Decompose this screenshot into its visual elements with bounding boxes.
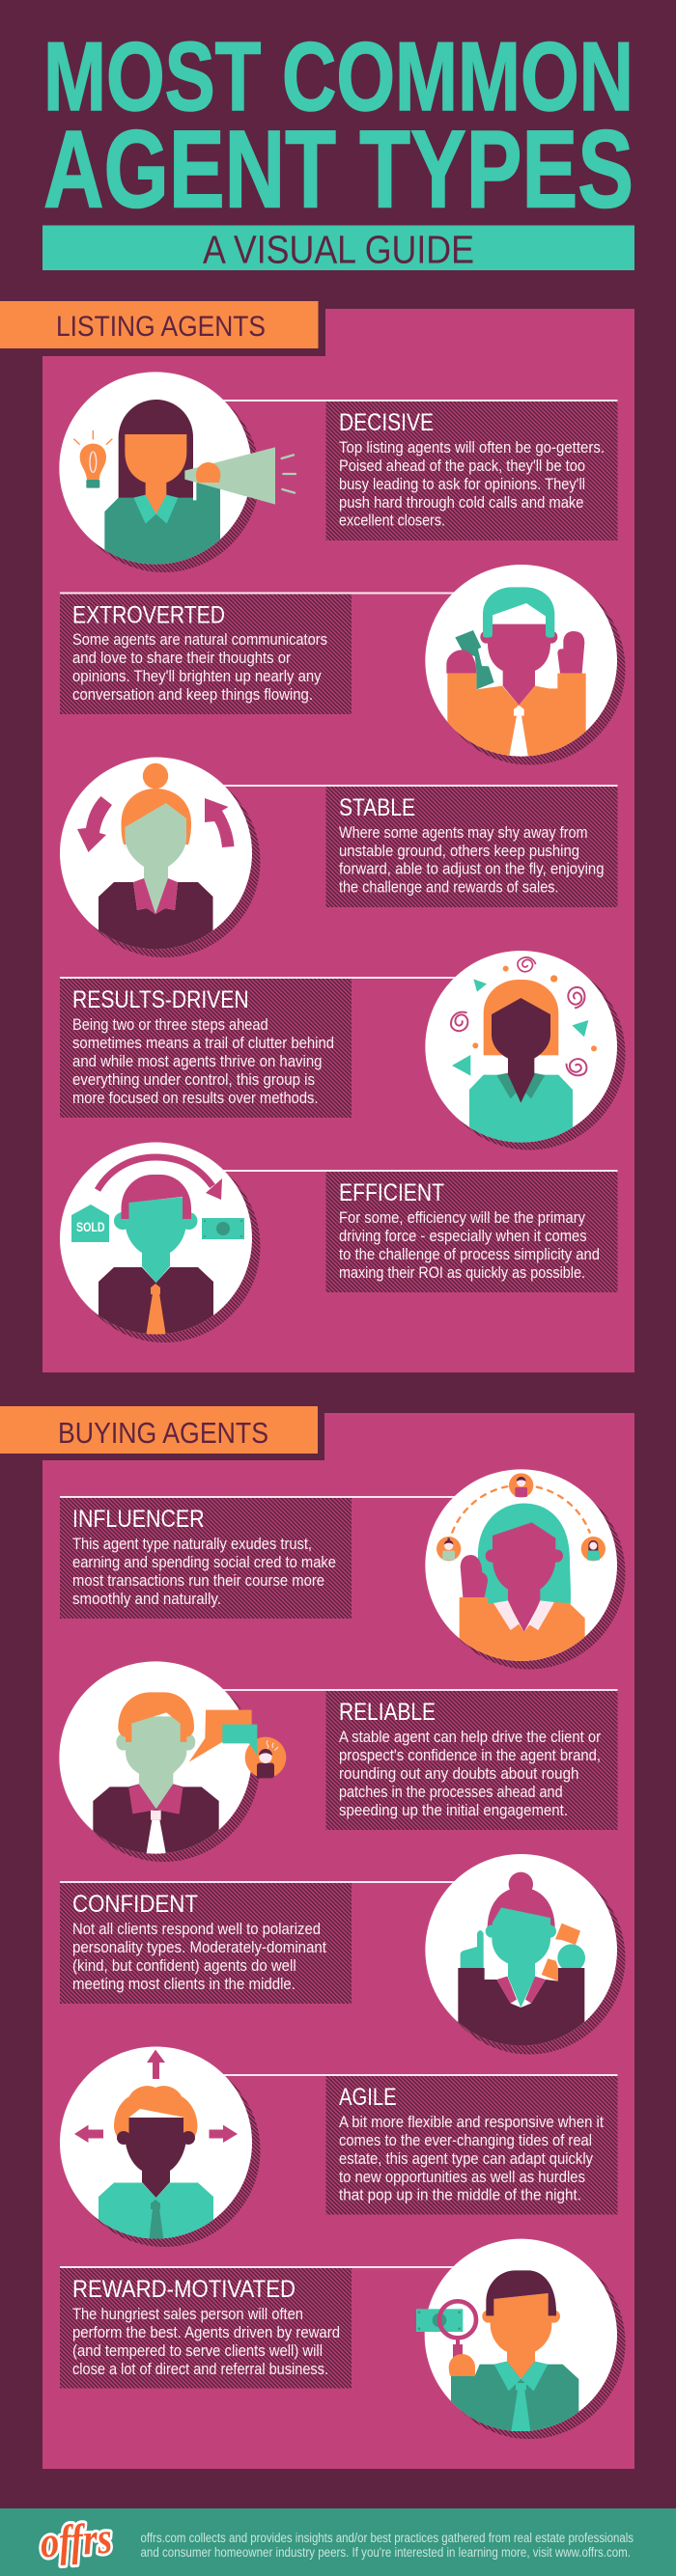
logo: offrs: offrs bbox=[39, 2513, 113, 2567]
text box: reliable: patches in the processes ahead and bbox=[339, 1784, 563, 1801]
text box: decisive: excellent closers. bbox=[339, 512, 445, 529]
text box: influencer: most transactions run their course more bbox=[72, 1572, 324, 1590]
icon: right avatar bbox=[581, 1537, 606, 1561]
text box: confident: (kind, but confident) agents do well bbox=[72, 1957, 296, 1975]
icon: arrow up bbox=[147, 2050, 165, 2079]
text box: agile bbox=[326, 2076, 618, 2214]
text box: agile: estate, this agent type can adapt quickly bbox=[339, 2150, 594, 2168]
icon: top avatar bbox=[509, 1473, 533, 1498]
text box: reliable: RELIABLE bbox=[339, 1699, 436, 1726]
text box: reward-motivated: The hungriest sales person will often bbox=[72, 2306, 303, 2323]
icon: sold tag bbox=[71, 1205, 109, 1242]
text box: efficient: maxing their ROI as quickly as possible. bbox=[339, 1264, 585, 1282]
icon: teal speech bubble bbox=[222, 1725, 257, 1755]
text box: reliable: A stable agent can help drive the client or bbox=[339, 1729, 601, 1746]
text box: decisive: DECISIVE bbox=[339, 409, 434, 436]
item: extroverted bbox=[60, 565, 626, 765]
illustration: man with speech bubbles bbox=[59, 1661, 286, 1861]
text box: confident: personality types. Moderately-dominant bbox=[72, 1939, 326, 1956]
banner: buying agents: BUYING AGENTS bbox=[58, 1416, 268, 1450]
text box: results-driven: and while most agents thrive on having bbox=[72, 1053, 323, 1070]
icon: left avatar bbox=[437, 1537, 461, 1561]
illustration: man with magnifier and money bbox=[416, 2239, 617, 2440]
icon: megaphone bbox=[184, 447, 296, 505]
icon: phone bbox=[542, 1924, 580, 1981]
banner: listing agents: LISTING AGENTS bbox=[56, 311, 266, 343]
icon: magnifying glass bbox=[439, 2301, 476, 2359]
item: reward-motivated bbox=[60, 2239, 626, 2440]
subtitle bar bbox=[42, 226, 634, 272]
text box: results-driven bbox=[60, 979, 352, 1118]
text box: stable: the challenge and rewards of sales. bbox=[339, 878, 558, 896]
item: confident bbox=[60, 1854, 626, 2054]
text box: extroverted: and love to share their thoughts or bbox=[72, 650, 291, 667]
text box: reward-motivated: REWARD-MOTIVATED bbox=[72, 2276, 296, 2303]
text box: efficient bbox=[326, 1172, 618, 1292]
text box: stable: unstable ground, others keep pushing bbox=[339, 843, 579, 860]
panel: buying agents bbox=[42, 1413, 634, 2469]
text box: reward-motivated: (and tempered to serve clients well) will bbox=[72, 2342, 323, 2360]
text box: extroverted: Some agents are natural communicators bbox=[72, 631, 327, 649]
icon: sold tag: SOLD bbox=[76, 1219, 104, 1234]
text box: reliable: speeding up the initial engagement. bbox=[339, 1802, 568, 1819]
footer bbox=[0, 2508, 676, 2576]
text box: agile: that pop up in the middle of the night. bbox=[339, 2187, 581, 2204]
icon: orange speech bubble bbox=[189, 1710, 252, 1762]
text box: influencer: earning and spending social cred to make bbox=[72, 1554, 336, 1571]
banner: buying agents bbox=[0, 1406, 318, 1454]
text box: confident: meeting most clients in the middle. bbox=[72, 1976, 296, 1993]
text box: decisive bbox=[326, 402, 618, 540]
icon: arrow left bbox=[74, 2125, 103, 2143]
illustration: woman with network bbox=[425, 1469, 617, 1668]
text box: influencer: smoothly and naturally. bbox=[72, 1591, 221, 1608]
icon: curved arrow bbox=[98, 1157, 222, 1200]
text box: decisive: Poised ahead of the pack, they'll be too bbox=[339, 457, 585, 475]
text box: influencer: This agent type naturally exudes trust, bbox=[72, 1536, 312, 1553]
text box: results-driven: more focused on results over methods. bbox=[72, 1090, 319, 1107]
text box: extroverted: EXTROVERTED bbox=[72, 602, 225, 629]
text box: reliable: prospect's confidence in the agent brand, bbox=[339, 1747, 601, 1764]
panel: listing agents bbox=[42, 309, 634, 1372]
text box: confident: Not all clients respond well to polarized bbox=[72, 1921, 321, 1938]
text box: stable: forward, able to adjust on the fly, enjoying bbox=[339, 861, 605, 878]
text box: results-driven: Being two or three steps ahead bbox=[72, 1016, 268, 1034]
banner: listing agents bbox=[0, 301, 319, 348]
text box: agile: AGILE bbox=[339, 2084, 397, 2111]
illustration: man with directional arrows bbox=[60, 2046, 252, 2249]
subtitle bar: A VISUAL GUIDE bbox=[203, 228, 474, 272]
text box: agile: to new opportunities as well as hurdles bbox=[339, 2169, 585, 2186]
item: decisive bbox=[59, 372, 617, 572]
icon: light bulb bbox=[73, 430, 112, 488]
text box: extroverted: opinions. They'll brighten up nearly any bbox=[72, 668, 322, 685]
text box: reliable bbox=[326, 1691, 618, 1830]
illustration: woman with megaphone bbox=[59, 372, 296, 572]
text box: efficient: to the challenge of process simplicity and bbox=[339, 1246, 600, 1263]
title bbox=[43, 23, 634, 232]
icon: money bbox=[416, 2309, 463, 2332]
icon: client avatar bbox=[245, 1737, 286, 1778]
illustration: woman with phone and raised hand bbox=[425, 1854, 617, 2054]
text box: reliable: rounding out any doubts about rough bbox=[339, 1765, 579, 1783]
text box: results-driven: everything under control, this group is bbox=[72, 1071, 315, 1089]
illustration: woman with confetti bbox=[425, 951, 617, 1151]
text box: reward-motivated bbox=[60, 2268, 352, 2388]
item: efficient bbox=[60, 1143, 618, 1351]
icon: money bbox=[202, 1218, 244, 1239]
text box: reward-motivated: perform the best. Agents driven by reward bbox=[72, 2324, 340, 2341]
text box: decisive: Top listing agents will often be go-getters. bbox=[339, 439, 605, 457]
text box: stable: STABLE bbox=[339, 794, 415, 821]
text box: confident bbox=[60, 1883, 352, 2004]
icon: arrow right bbox=[209, 2125, 238, 2143]
item: results-driven bbox=[60, 951, 626, 1151]
text box: decisive: push hard through cold calls and make bbox=[339, 494, 583, 512]
text box: results-driven: RESULTS-DRIVEN bbox=[72, 986, 249, 1013]
illustration: woman between arrows bbox=[60, 757, 252, 965]
icon: curved arrow right bbox=[205, 798, 234, 847]
item: influencer bbox=[60, 1469, 626, 1670]
text box: agile: A bit more flexible and responsive when it bbox=[339, 2114, 604, 2131]
icon: curved arrow left bbox=[77, 796, 112, 852]
item: agile bbox=[60, 2046, 618, 2249]
text box: extroverted: conversation and keep things flowing. bbox=[72, 686, 313, 704]
text box: confident: CONFIDENT bbox=[72, 1891, 198, 1918]
text box: extroverted bbox=[60, 595, 352, 714]
item: stable bbox=[60, 757, 618, 965]
illustration: man on phone bbox=[425, 565, 617, 765]
text box: influencer bbox=[60, 1498, 352, 1619]
text box: efficient: For some, efficiency will be the primary bbox=[339, 1209, 586, 1227]
text box: reward-motivated: close a lot of direct and referral business. bbox=[72, 2361, 328, 2378]
text box: stable bbox=[326, 787, 618, 907]
text box: decisive: busy leading to ask for opinions. They'll bbox=[339, 476, 585, 493]
text box: stable: Where some agents may shy away from bbox=[339, 824, 587, 842]
footer text bbox=[141, 2531, 634, 2560]
item: reliable bbox=[59, 1661, 617, 1862]
text box: agile: comes to the ever-changing tides of real bbox=[339, 2132, 592, 2149]
text box: efficient: EFFICIENT bbox=[339, 1179, 444, 1206]
text box: results-driven: sometimes means a trail of clutter behind bbox=[72, 1035, 334, 1052]
text box: influencer: INFLUENCER bbox=[72, 1506, 205, 1533]
illustration: man with sold tag and money bbox=[60, 1143, 252, 1351]
text box: efficient: driving force - especially when it comes bbox=[339, 1228, 587, 1245]
